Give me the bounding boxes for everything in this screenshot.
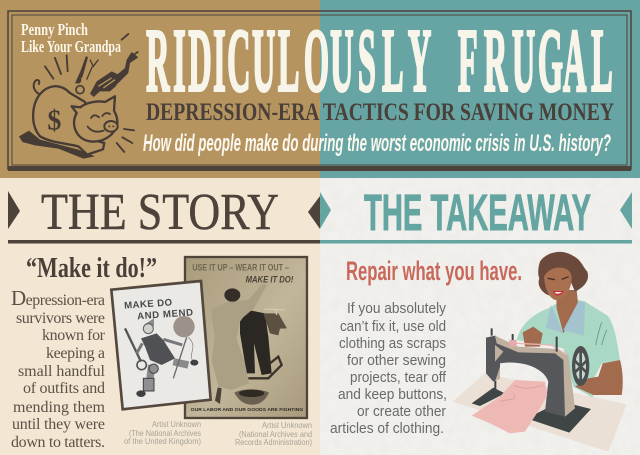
dollar sign: $: [47, 106, 61, 137]
man trousers: [240, 310, 272, 375]
caption: right poster: [235, 421, 312, 447]
hair: [538, 252, 588, 296]
main title: RIDICULOUSLY: [146, 11, 431, 110]
illustration: woman at sewing machine: [453, 252, 627, 452]
woman legs: [215, 387, 222, 404]
pig head: [72, 96, 117, 142]
tagline: Penny Pinch: [21, 20, 88, 39]
takeaway body text: articles of clothing.: [330, 420, 444, 437]
collar: [546, 302, 585, 336]
stool: [248, 357, 282, 378]
rule: takeaway: [320, 240, 632, 244]
poster title: AND MEND: [137, 307, 193, 322]
story body text: until they were: [12, 416, 105, 433]
heading: the story: [8, 184, 320, 241]
pig snout: [104, 121, 118, 132]
doll arms: [137, 339, 182, 353]
hand details: [80, 76, 115, 88]
motion lines: [45, 34, 138, 152]
finger in slot: [76, 86, 84, 94]
panel: the story background: [0, 178, 320, 455]
subheading: repair what you have: Repair what you have.: [346, 256, 522, 286]
woman hair: [224, 288, 240, 302]
machine cream trim: [495, 336, 575, 417]
poster: make do and mend: [111, 281, 211, 409]
panel: the takeaway background: [320, 178, 640, 455]
spindles: [492, 328, 557, 392]
arrow right: [308, 196, 320, 229]
caption: left poster: Artist Unknown: [152, 420, 201, 429]
woman dress: [212, 284, 267, 390]
caption: left poster: of the United Kingdom): [124, 437, 201, 446]
fabric creases: [500, 385, 543, 402]
poster title: [124, 297, 193, 322]
poster: use it up, wear it out: [185, 257, 307, 418]
story body text: [11, 286, 106, 451]
takeaway body text: for other sewing: [347, 352, 446, 369]
pig shadow: [19, 131, 95, 159]
story body text: survivors were: [16, 310, 105, 327]
takeaway body text: [330, 300, 447, 437]
story body text: keeping a: [46, 345, 105, 362]
hand: [523, 327, 543, 347]
caption: right poster: Artist Unknown: [262, 421, 312, 430]
doll legs: [150, 362, 188, 378]
story body text: Depression-era: [11, 286, 105, 310]
caption: right poster: (National Archives and: [239, 430, 312, 439]
thread ball: [173, 316, 195, 337]
machine wheel: [572, 346, 589, 386]
arrow left teal: [320, 192, 331, 229]
poster headline: USE IT UP – WEAR IT OUT –: [192, 263, 289, 273]
poster title: MAKE DO: [124, 297, 173, 312]
scissors: [125, 328, 141, 362]
takeaway body text: and keep buttons,: [338, 386, 447, 403]
face: [544, 267, 572, 300]
poster background: [185, 257, 307, 418]
main title: [146, 11, 613, 110]
main title: FRUGAL: [458, 11, 613, 110]
takeaway body text: If you absolutely: [347, 300, 446, 317]
caption: left poster: [124, 420, 201, 446]
spools: [143, 364, 158, 391]
pig body: [33, 86, 104, 155]
story body text: mending them: [13, 399, 106, 416]
doll body: [141, 333, 175, 365]
shoes: [136, 360, 198, 397]
needle and thread: [173, 337, 187, 378]
machine base plates: [472, 388, 591, 433]
pig tail: [34, 80, 41, 95]
takeaway body text: clothing as scraps: [339, 335, 446, 352]
icon: piggy bank with hand: [19, 34, 138, 159]
takeaway body text: projects, tear off: [350, 369, 447, 386]
rule: story: [8, 240, 320, 244]
hand and arm: [75, 52, 138, 97]
header teal half: [320, 0, 640, 178]
tagline: Like Your Grandpa: [21, 37, 121, 56]
hanger: [264, 308, 285, 315]
story body text: small handful: [18, 363, 106, 380]
heading: the takeaway: [320, 184, 632, 241]
basket contents: [239, 390, 264, 397]
pig face: [88, 113, 110, 132]
poster sheet: [111, 281, 211, 409]
woman shirt: [517, 300, 620, 398]
story body text: known for: [42, 327, 106, 344]
panel: header banner: [0, 0, 640, 178]
poster headline italic: MAKE IT DO!: [246, 274, 293, 284]
arrow right teal: [620, 192, 632, 229]
table: [453, 373, 627, 452]
header double border: [8, 11, 631, 171]
sleeve creases: [596, 322, 607, 345]
pink spool and thread: [509, 340, 567, 355]
subheading: make it do: “Make it do!”: [26, 253, 157, 284]
heading text: THE STORY: [41, 184, 279, 241]
takeaway body text: or create other: [357, 403, 446, 420]
woman arm: [575, 360, 623, 395]
poster footer: OUR LABOR AND OUR GOODS ARE FIGHTING: [191, 407, 303, 413]
hanging coat: [263, 313, 287, 335]
tagline: [21, 20, 121, 56]
sewing machine: [486, 336, 574, 417]
caption: right poster: Records Administration): [235, 438, 312, 447]
teeth: [555, 292, 562, 294]
takeaway body text: can’t fix it, use old: [340, 318, 446, 335]
doll head: [143, 318, 154, 334]
story body text: down to tatters.: [11, 434, 105, 451]
eyes: [548, 277, 569, 280]
woman neck: [556, 290, 578, 333]
fabric: [472, 380, 547, 433]
sewing basket: [234, 389, 269, 405]
caption: left poster: (The National Archives: [129, 429, 201, 438]
arrow left: [8, 191, 20, 229]
mouth: [553, 291, 564, 295]
header tan half: [0, 0, 320, 178]
story body text: of outfits and: [23, 380, 105, 397]
